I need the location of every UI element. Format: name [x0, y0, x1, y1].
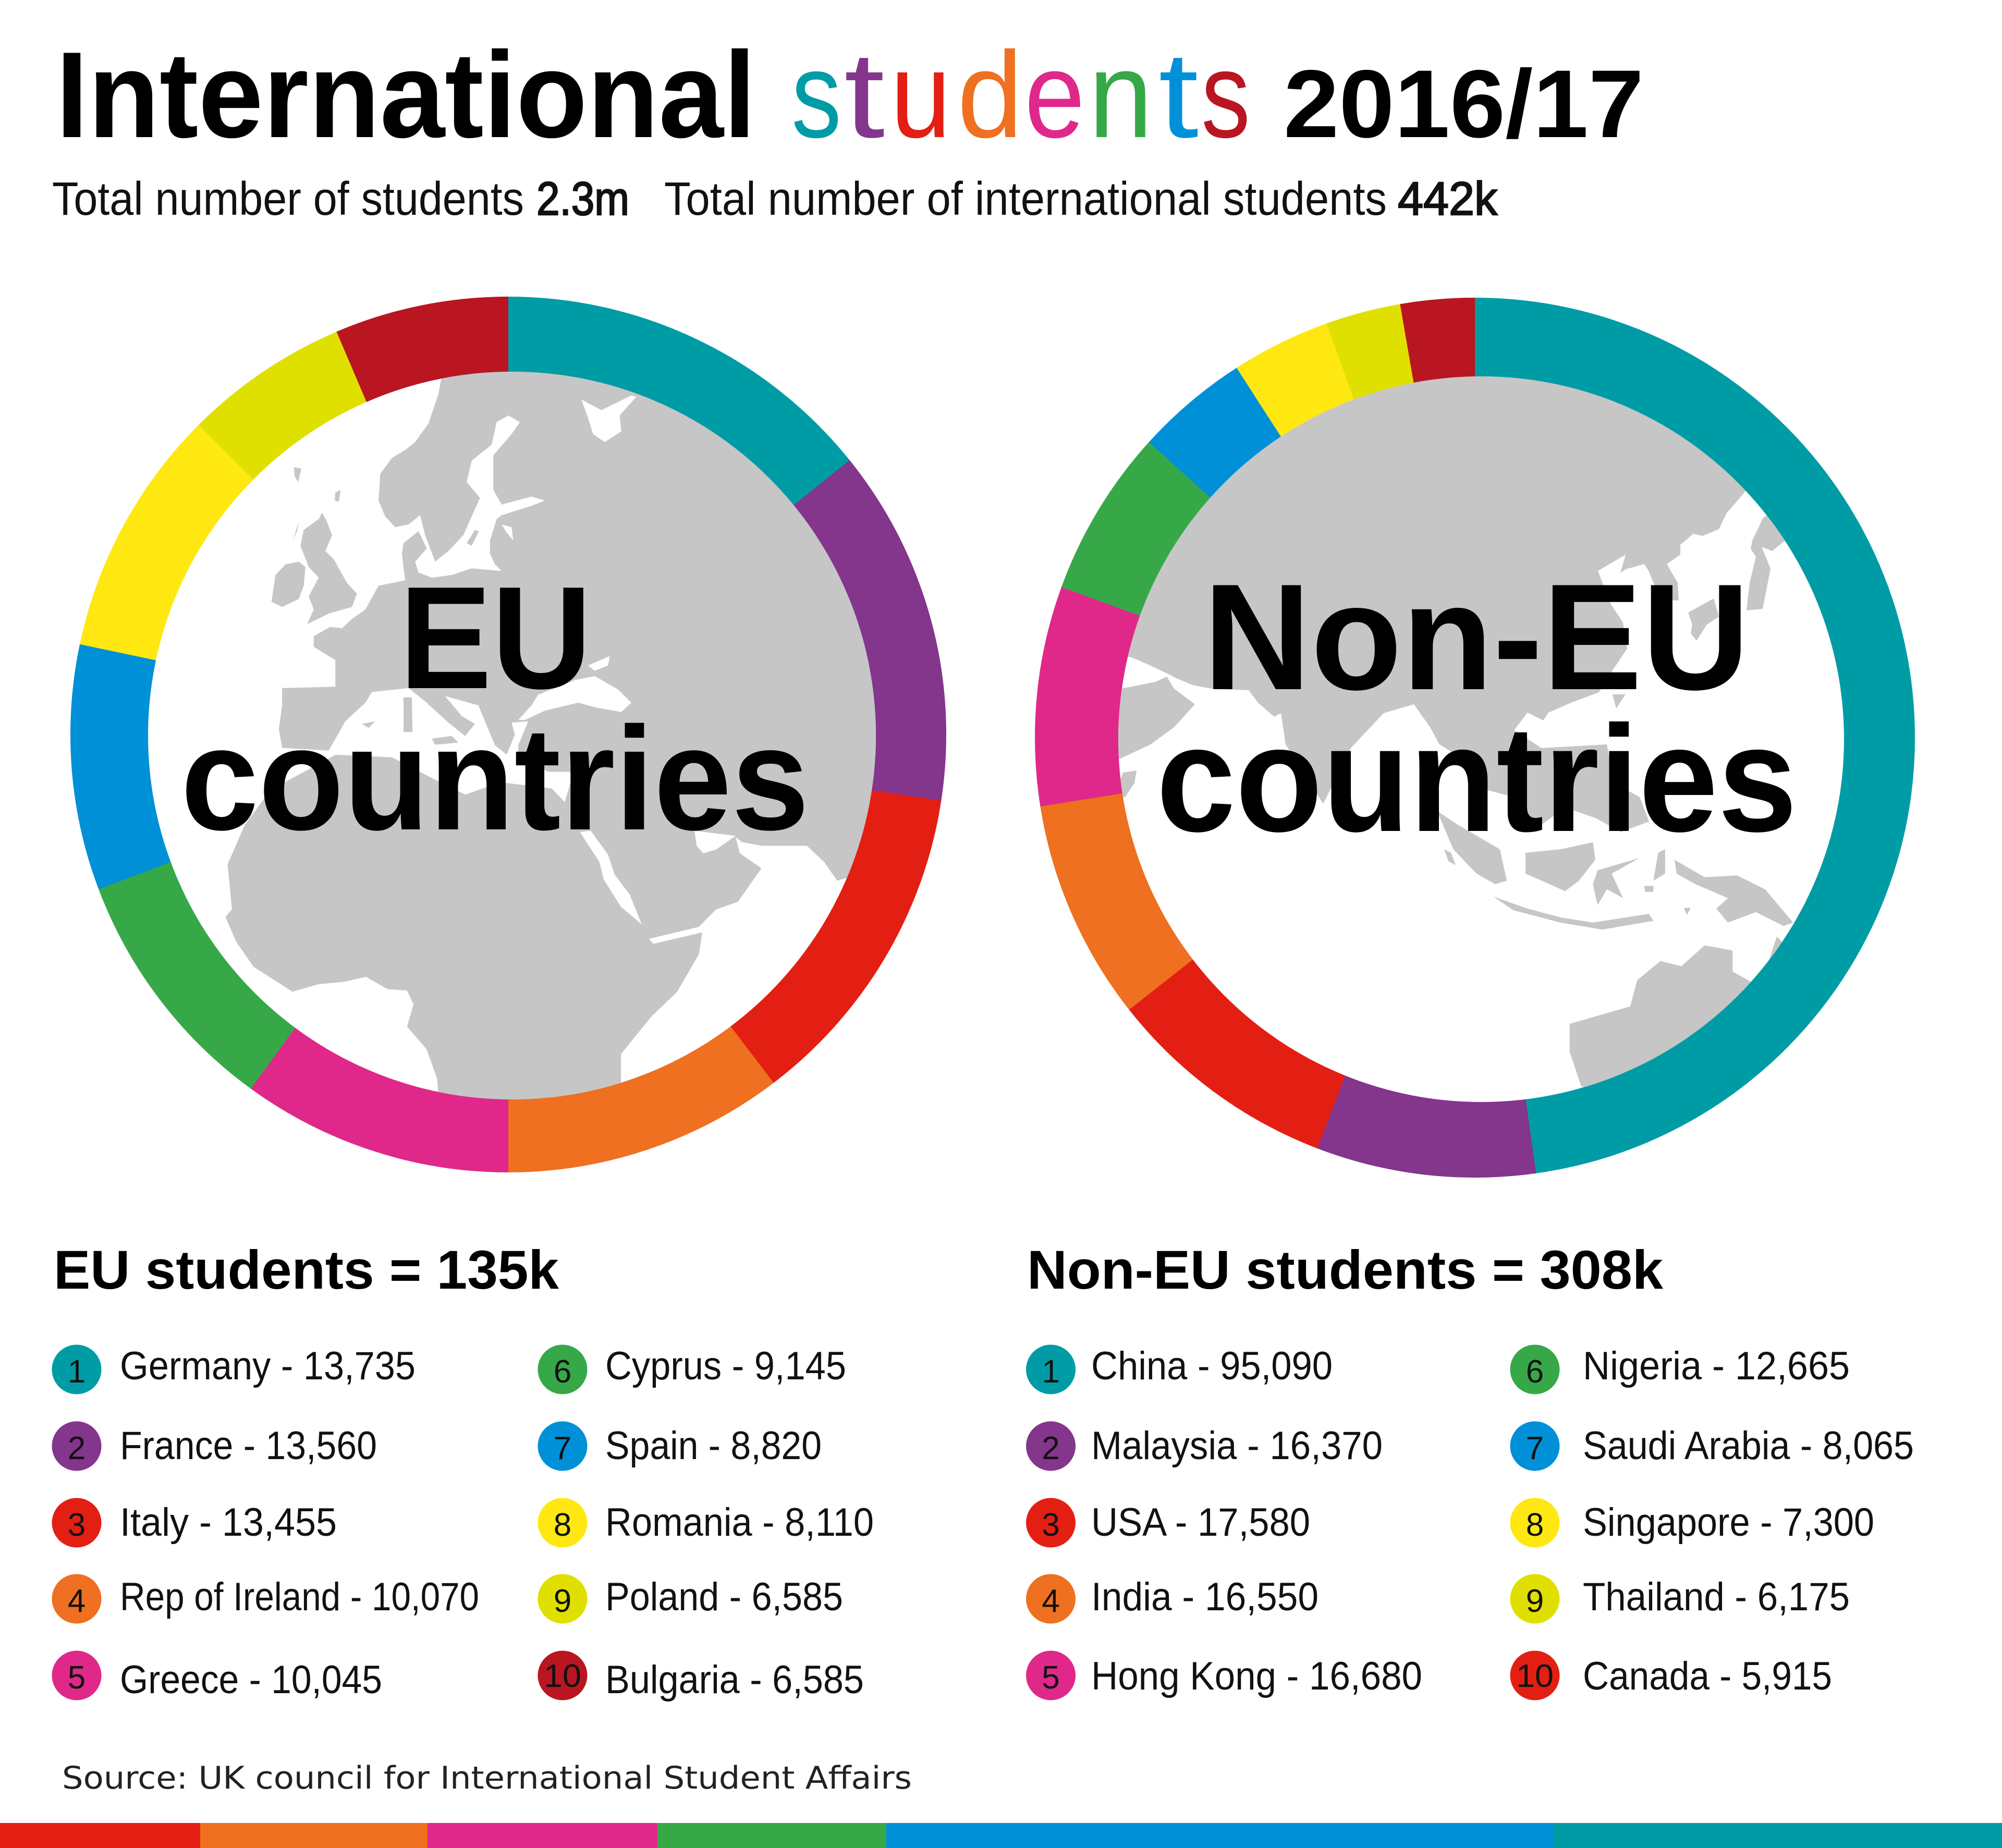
list item 3: Italy - 13,455 — [120, 1500, 337, 1545]
map islands: Britain, Ireland and smaller islands — [300, 512, 357, 624]
list item 10 — [538, 1650, 864, 1702]
list item 3: 3 — [1042, 1507, 1060, 1543]
donut label: Non-EU countries: Non-EU — [1203, 553, 1750, 721]
title — [56, 26, 1644, 163]
donut ring: Non-EU country shares — [1078, 340, 1872, 1135]
list item 9: 9 — [554, 1583, 571, 1619]
list item 6 — [1510, 1344, 1850, 1394]
panel: Non-EU donut chart — [1002, 209, 1886, 1135]
list item 10: 10 — [1516, 1658, 1554, 1694]
title word: students in rainbow letters: u — [890, 26, 951, 163]
list item 2: 2 — [68, 1430, 86, 1466]
donut ring: EU country shares — [113, 339, 904, 1130]
list item 1 — [1026, 1344, 1333, 1394]
map: Africa and Arabia — [225, 744, 876, 1099]
subtitle totals — [52, 173, 1498, 225]
donut label: EU countries — [181, 557, 809, 861]
list item 7: Spain - 8,820 — [605, 1424, 822, 1468]
list item 7: 7 — [1526, 1430, 1544, 1466]
list item 1: Germany - 13,735 — [120, 1344, 416, 1388]
map seas: Red Sea and Persian Gulf — [580, 831, 642, 924]
list item 4: 4 — [68, 1583, 86, 1619]
list item 1: China - 95,090 — [1091, 1344, 1333, 1388]
map seas: Black Sea, Azov, White Sea, Ladoga — [518, 676, 631, 720]
list item 8: Singapore - 7,300 — [1583, 1500, 1874, 1545]
list item 8 — [1510, 1498, 1874, 1547]
list item 3: 3 — [68, 1507, 86, 1543]
list item 1: 1 — [68, 1354, 86, 1390]
panel: EU students list — [52, 1240, 874, 1702]
map: Arabia and Horn of Africa — [1118, 677, 1195, 797]
title word: students in rainbow letters: n — [1089, 26, 1153, 163]
list item 3 — [1026, 1498, 1310, 1547]
list item 1: 1 — [1042, 1354, 1060, 1390]
heading: Non-EU students total: Non-EU students = 308k — [1027, 1240, 1664, 1301]
list item 7: 7 — [554, 1430, 571, 1466]
list item 6: 6 — [1526, 1354, 1544, 1390]
list item 2: Malaysia - 16,370 — [1091, 1424, 1383, 1468]
list item 7 — [538, 1421, 822, 1471]
list item 10: 10 — [544, 1658, 581, 1694]
subtitle totals: Total number of students — [52, 173, 524, 225]
donut label: EU countries: EU — [399, 557, 592, 719]
map: Japan, Korea and Taiwan — [1613, 515, 1785, 708]
list item 9 — [538, 1574, 843, 1623]
list item 4: India - 16,550 — [1091, 1575, 1319, 1619]
list item 10: Canada - 5,915 — [1583, 1654, 1832, 1698]
list item 9: 9 — [1526, 1583, 1544, 1619]
panel: Non-EU students list — [1026, 1240, 1914, 1700]
list item 9: Thailand - 6,175 — [1583, 1575, 1850, 1619]
title word: students in rainbow letters: s — [1201, 26, 1250, 163]
list item 7: Saudi Arabia - 8,065 — [1583, 1424, 1914, 1468]
list item 5 — [52, 1650, 382, 1702]
subtitle totals: 442k — [1398, 173, 1498, 225]
list item 2 — [1026, 1421, 1383, 1471]
list item 4: Rep of Ireland - 10,070 — [120, 1575, 479, 1619]
donut label: Non-EU countries: countries — [1156, 694, 1797, 863]
subtitle totals: 2.3m — [536, 173, 629, 225]
donut label: Non-EU countries — [1156, 553, 1797, 863]
title: International — [56, 26, 756, 163]
list item 4 — [52, 1574, 479, 1623]
list item 8: 8 — [554, 1507, 571, 1543]
source note: Source: UK council for International Student Affairs — [62, 1760, 912, 1796]
title word: students in rainbow letters — [791, 26, 1250, 163]
title word: students in rainbow letters: e — [1024, 26, 1085, 163]
map: South-East Asian islands and Australia — [1437, 811, 1886, 1097]
list item 5: Hong Kong - 16,680 — [1091, 1654, 1422, 1698]
list item 3: USA - 17,580 — [1091, 1500, 1310, 1545]
list item 2 — [52, 1421, 377, 1471]
list item 9 — [1510, 1574, 1850, 1623]
list item 6: Cyprus - 9,145 — [605, 1344, 846, 1388]
list item 2: 2 — [1042, 1430, 1060, 1466]
list item 5: Greece - 10,045 — [120, 1658, 382, 1702]
list item 6: 6 — [554, 1354, 571, 1390]
list item 6 — [538, 1344, 846, 1394]
list item 4 — [1026, 1574, 1319, 1623]
list item 5: 5 — [68, 1660, 86, 1696]
list item 6: Nigeria - 12,665 — [1583, 1344, 1850, 1388]
list item 1 — [52, 1344, 416, 1394]
title word: students in rainbow letters: s — [791, 26, 841, 163]
title word: students in rainbow letters: d — [957, 26, 1023, 163]
list item 7 — [1510, 1421, 1914, 1471]
list item 9: Poland - 6,585 — [605, 1575, 843, 1619]
map: Asia and Australia — [1002, 209, 1886, 1097]
bottom colour bar — [0, 1823, 2002, 1848]
list item 8: 8 — [1526, 1507, 1544, 1543]
list item 8 — [538, 1498, 874, 1547]
panel: EU donut chart — [113, 338, 954, 1130]
donut label: EU countries: countries — [181, 696, 809, 861]
title: 2016/17 — [1284, 51, 1644, 158]
map: Europe and Africa — [225, 372, 876, 1099]
list item 5: 5 — [1042, 1660, 1060, 1696]
list item 10: Bulgaria - 6,585 — [605, 1658, 864, 1702]
title word: students in rainbow letters: t — [1158, 26, 1199, 163]
heading: EU students total: EU students = 135k — [54, 1240, 559, 1301]
list item 2: France - 13,560 — [120, 1424, 377, 1468]
list item 4: 4 — [1042, 1583, 1060, 1619]
list item 3 — [52, 1498, 337, 1547]
title word: students in rainbow letters: t — [844, 26, 885, 163]
subtitle totals: Total number of international students — [664, 173, 1387, 225]
list item 10 — [1510, 1650, 1832, 1700]
list item 8: Romania - 8,110 — [605, 1500, 874, 1545]
